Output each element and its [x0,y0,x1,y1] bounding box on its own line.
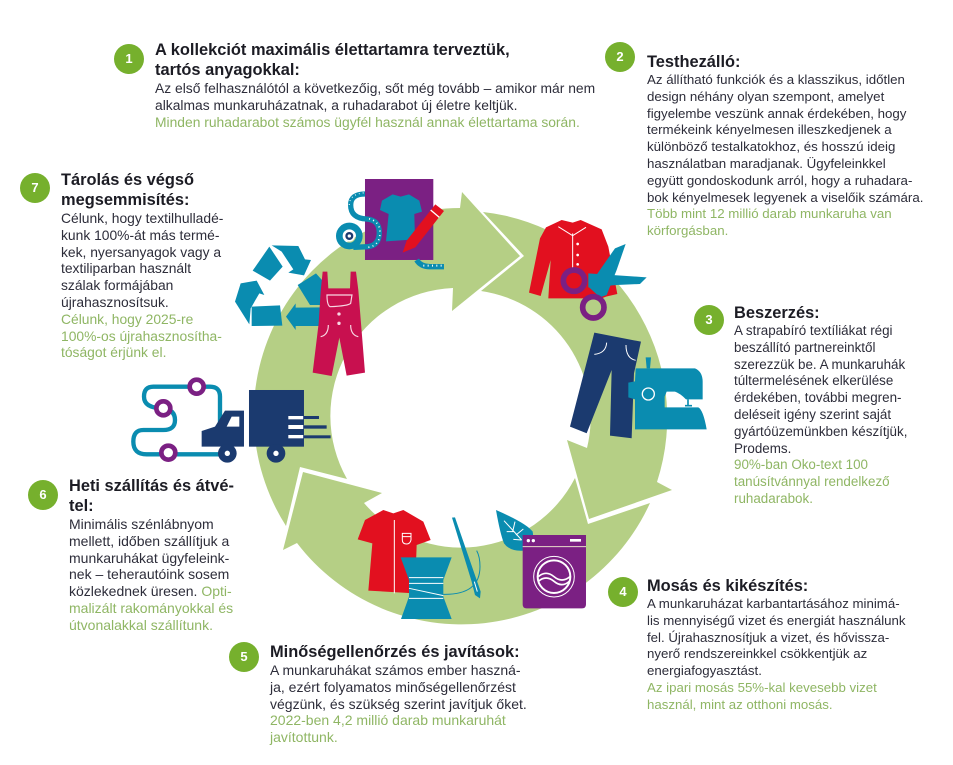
text block 2: fit: figyelembe veszünk annak érdekében, hogy [647,106,906,121]
text block 3: sourcing: Beszerzés: [734,304,820,322]
icon: truck [202,411,244,447]
text block 3: sourcing: gyártóüzemünkben készítjük, [734,424,907,439]
text block 1: design: Az első felhasználótól a következőig, sőt még tovább – amikor már nem [155,80,595,96]
text block 2: fit: Az állítható funkciók és a klasszikus, időtlen [647,72,905,87]
number badge 4 [608,577,638,607]
text block 6: delivery: nek – teherautóink sosem [69,566,229,582]
text block 7: storage and disposal: tóságot érjünk el. [61,344,166,360]
text block 7: storage and disposal: kek, nyersanyagok vagy a [61,244,221,260]
icon: leaf [496,510,533,551]
text block 7: storage and disposal: kunk 100%-át más termé- [61,227,220,243]
icon: scissors [588,273,647,287]
text block 3: sourcing: szerezzük be. A munkaruhák [734,357,905,372]
icon: navy trousers [570,333,641,438]
number badge 7: 7 [31,180,39,195]
icon: route [133,387,223,454]
number badge 2 [605,42,635,72]
text block 2: fit: Testhezálló: [647,53,741,71]
text block 5: quality control: 2022-ben 4,2 millió darab munkaruhát [270,712,506,728]
number badge 1: 1 [125,51,133,66]
text block 5: quality control: Minőségellenőrzés és javítások: [270,643,520,661]
text block 3: sourcing: 90%-ban Oko-text 100 [734,457,868,472]
cycle ring [254,192,672,624]
icon: washing machine [523,535,586,608]
text block 6: delivery: mellett, időben szállítjuk a [69,533,229,549]
text block 4: washing: használ, mint az otthoni mosás. [647,697,833,712]
number badge 5 [229,642,259,672]
icon: leaf and washing machine [496,510,586,608]
text block 7: storage and disposal: Tárolás és végső [61,171,194,189]
text block 4: washing: A munkaruházat karbantartásához minimá- [647,596,900,611]
text block 2: fit: design néhány olyan szempont, amelyet [647,89,884,104]
text block 5: quality control: javítottunk. [270,729,338,745]
text block 3: sourcing [734,304,907,506]
text block 1: design: alkalmas munkaruházatnak, a ruhadarabot új életre keltjük. [155,97,517,113]
icon: thread [443,551,480,594]
text block 2: fit: körforgásban. [647,223,728,238]
text block 6: delivery: malizált rakományokkal és [69,600,233,616]
text block 4: washing: Az ipari mosás 55%-kal kevesebb vizet [647,680,877,695]
text block 7: storage and disposal: 100%-os újrahasznosítha- [61,328,222,344]
text block 1: design: tartós anyagokkal: [155,61,300,79]
text block 6: delivery: útvonalakkal szállítunk. [69,617,213,633]
text block 4: washing [647,577,906,712]
text block 6: delivery: munkaruhákat ügyfeleink- [69,550,229,566]
text block 4: washing: energiafogyasztást. [647,663,762,678]
text block 3: sourcing: beszállító partnereinktől [734,340,875,355]
icon: red jacket, scissors and trousers [529,220,647,438]
number badge 4: 4 [619,584,627,599]
text block 3: sourcing: ruhadarabok. [734,491,813,506]
number badge 2: 2 [616,49,624,64]
arrow: design to washing [481,212,672,519]
text block 2: fit: különböző testalkatokhoz, és hosszú ideig [647,139,895,154]
text block 5: quality control: ja, ezért folyamatos minőségellenőrzést [270,679,516,695]
icon: purple design card [365,179,433,260]
text block 3: sourcing: deléseit igény szerint saját [734,407,891,422]
text block 6: delivery: közlekednek üresen. Opti- [69,583,232,599]
icon: recycling arrows [235,245,325,330]
number badge 3: 3 [705,312,713,327]
icon: red pencil [403,204,444,253]
text block 4: washing: fel. Újrahasznosítjuk a vizet, és hővissza- [647,630,889,645]
icon: overalls [313,272,365,376]
text block 2: fit: bok kényelmesek legyenek a viselőik számára. [647,190,923,205]
icon: needle [452,517,481,598]
icon: red jacket [529,220,617,298]
icon: red t-shirt [358,510,431,593]
number badge 6: 6 [39,487,47,502]
icon: spool [401,557,452,619]
number badge 5: 5 [240,649,248,664]
number badge 3 [694,305,724,335]
text block 3: sourcing: érdekében, további megren- [734,390,902,405]
number badge 7 [20,173,50,203]
number badge 1 [114,44,144,74]
text block 4: washing: nyerő rendszereinkkel csökkentjük az [647,646,867,661]
text block 3: sourcing: A strapabíró textíliákat régi [734,323,893,338]
icon: design, recycling and overalls [235,179,444,376]
text block 2: fit: termékeink kényelmesen illeszkedjenek a [647,122,892,137]
text block 2: fit: együtt gondoskodunk arról, hogy a ruhadara- [647,173,912,188]
text block 7: storage and disposal: Célunk, hogy 2025-re [61,311,193,327]
text block 2: fit: Több mint 12 millió darab munkaruha van [647,206,892,221]
text block 1: design: Minden ruhadarabot számos ügyfél használ annak élettartama során. [155,114,580,130]
text block 6: delivery [69,477,234,633]
text block 2: fit [647,53,923,238]
arrow: washing to delivery [283,472,650,624]
text block 3: sourcing: tanúsítvánnyal rendelkező [734,474,890,489]
text block 5: quality control [270,643,527,745]
text block 7: storage and disposal: textiliparban használt [61,260,191,276]
arrow: disposal to design [254,192,520,526]
text block 4: washing: lis mennyiségű vizet és energiát használunk [647,613,906,628]
text block 7: storage and disposal: megsemmisítés: [61,191,189,209]
icon: sewing machine [628,357,707,429]
text block 3: sourcing: Prodems. [734,441,791,456]
number badge 6 [28,480,58,510]
text block 4: washing: Mosás és kikészítés: [647,577,808,595]
text block 5: quality control: végzünk, és szükség szerint javítjuk őket. [270,696,527,712]
text block 3: sourcing: túltermelésének elkerülése [734,373,893,388]
icon: delivery truck and route [133,380,331,463]
text block 6: delivery: Minimális szénlábnyom [69,516,214,532]
text block 7: storage and disposal [61,171,223,360]
text block 7: storage and disposal: szálak formájában [61,277,173,293]
text block 7: storage and disposal: Célunk, hogy textilhulladé- [61,210,223,226]
text block 7: storage and disposal: újrahasznosítsuk. [61,294,169,310]
text block 6: delivery: tel: [69,497,94,515]
text block 5: quality control: A munkaruhákat számos ember haszná- [270,662,521,678]
text block 1: design [155,41,595,130]
icon: red shirt, thread spool and needle [358,510,481,619]
icon: measuring tape [339,193,444,267]
text block 2: fit: használatban maradjanak. Ügyfeleinkkel [647,156,886,171]
text block 1: design: A kollekciót maximális élettartamra terveztük, [155,41,510,59]
text block 6: delivery: Heti szállítás és átvé- [69,477,234,495]
icon: teal shirt [380,194,422,241]
